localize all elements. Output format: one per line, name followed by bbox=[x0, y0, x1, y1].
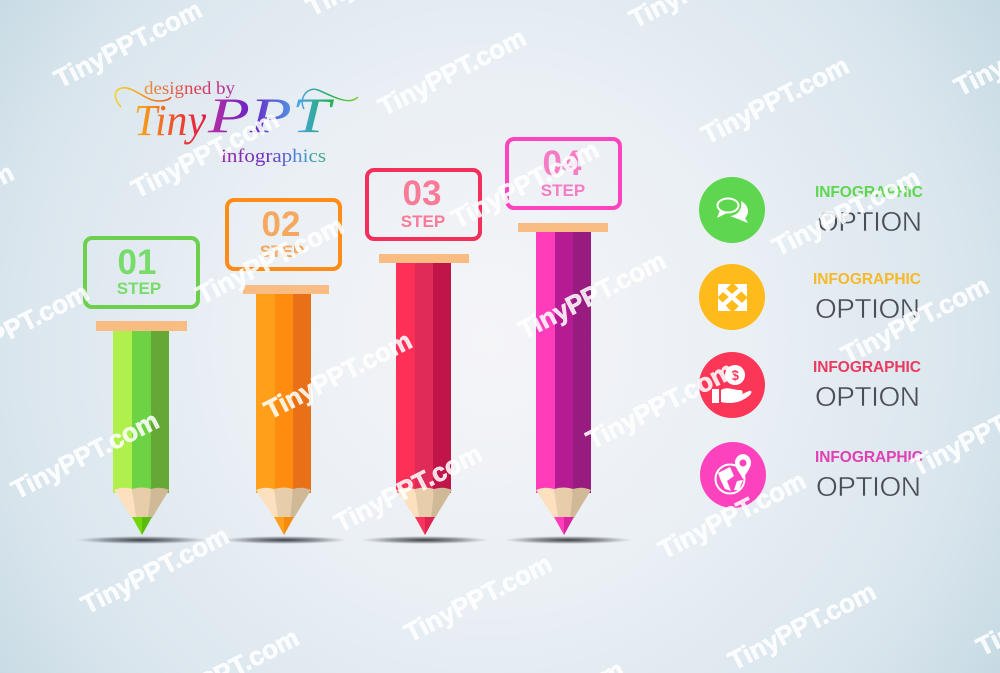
eraser band bbox=[96, 321, 187, 331]
watermarks: TinyPPT.com bbox=[696, 50, 854, 150]
step box 03: 03 bbox=[403, 174, 441, 213]
pencil 1: green bbox=[76, 238, 208, 544]
shadow bbox=[221, 536, 347, 544]
shadow bbox=[76, 536, 208, 544]
icon: globe with pin bbox=[700, 442, 766, 508]
step box 01: 01 bbox=[118, 243, 156, 282]
pencil tip bbox=[256, 488, 311, 535]
option 1 text: INFOGRAPHIC bbox=[815, 184, 923, 201]
watermarks: TinyPPT.com bbox=[259, 325, 417, 425]
logo: designed by TinyPPT infographics: Tiny bbox=[134, 96, 206, 145]
watermarks: TinyPPT.com bbox=[767, 162, 925, 262]
watermarks: TinyPPT.com bbox=[329, 438, 487, 538]
icon: hand with coin: $ bbox=[731, 367, 739, 383]
watermarks: TinyPPT.com bbox=[653, 465, 811, 565]
eraser band bbox=[379, 254, 469, 263]
option 2 bbox=[699, 264, 921, 330]
watermarks: TinyPPT.com bbox=[836, 270, 994, 370]
option 3 text bbox=[813, 359, 921, 412]
logo: designed by TinyPPT infographics bbox=[115, 78, 358, 167]
pencil 4: magenta bbox=[504, 139, 632, 544]
option 3 text: OPTION bbox=[815, 381, 920, 412]
step box 01 bbox=[85, 238, 198, 307]
watermarks: TinyPPT.com bbox=[446, 134, 604, 234]
option 1 text: OPTION bbox=[817, 206, 922, 237]
step box 01: STEP bbox=[117, 279, 161, 298]
option 1 text bbox=[815, 184, 923, 237]
option 2 text bbox=[813, 271, 921, 324]
option 2 text: OPTION bbox=[815, 293, 920, 324]
step box 04: STEP bbox=[541, 181, 585, 200]
watermarks: TinyPPT.com bbox=[126, 104, 284, 204]
option 3 text: INFOGRAPHIC bbox=[813, 359, 921, 376]
icon: expand arrows bbox=[699, 264, 765, 330]
pencil body bbox=[113, 331, 169, 493]
option 4 text bbox=[815, 449, 923, 502]
option 1 bbox=[699, 177, 923, 243]
logo: designed by TinyPPT infographics: PPT bbox=[207, 87, 334, 143]
step box 02: STEP bbox=[260, 242, 304, 261]
pencil body bbox=[536, 232, 591, 493]
watermarks: TinyPPT.com bbox=[513, 245, 671, 345]
pencil 2: orange bbox=[221, 200, 347, 544]
watermarks: TinyPPT.com bbox=[723, 576, 881, 673]
watermarks: TinyPPT.com bbox=[581, 355, 739, 455]
step box 02 bbox=[227, 200, 340, 269]
pencil body bbox=[256, 294, 311, 493]
watermarks: TinyPPT.com bbox=[191, 210, 349, 310]
option 2 text: INFOGRAPHIC bbox=[813, 271, 921, 288]
step box 04 bbox=[507, 139, 620, 208]
step box 03: STEP bbox=[401, 212, 445, 231]
watermarks: TinyPPT.com bbox=[373, 22, 531, 122]
logo: designed by TinyPPT infographics: infographics bbox=[221, 146, 326, 167]
step box 04: 04 bbox=[543, 144, 582, 183]
watermarks: TinyPPT.com bbox=[76, 520, 234, 620]
pencil tip bbox=[114, 488, 169, 535]
option 3 bbox=[699, 352, 921, 418]
shadow bbox=[361, 536, 489, 544]
pencil tip bbox=[536, 488, 591, 535]
step box 03 bbox=[367, 170, 480, 239]
step box 02: 02 bbox=[262, 205, 300, 244]
watermarks: TinyPPT.com bbox=[399, 548, 557, 648]
option 4 text: OPTION bbox=[816, 471, 921, 502]
watermarks: TinyPPT.com bbox=[6, 405, 164, 505]
icon: hand with coin bbox=[699, 352, 765, 418]
pencil body bbox=[396, 263, 451, 493]
shadow bbox=[504, 536, 632, 544]
option 4 text: INFOGRAPHIC bbox=[815, 449, 923, 466]
eraser band bbox=[518, 223, 608, 232]
icon: chat bubbles bbox=[699, 177, 765, 243]
option 4 bbox=[700, 442, 923, 508]
pencil tip bbox=[397, 488, 452, 535]
logo: designed by TinyPPT infographics: designed by bbox=[144, 78, 235, 98]
eraser band bbox=[243, 285, 329, 294]
pencil 3: red bbox=[361, 170, 489, 544]
